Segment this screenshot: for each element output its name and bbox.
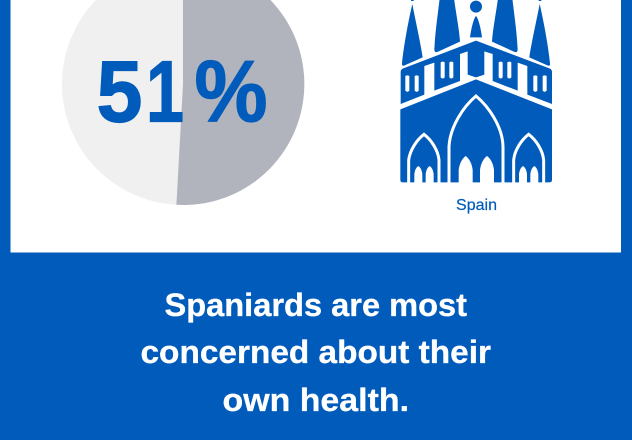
headline text: own health. (222, 382, 409, 418)
pie chart: 51 percent (62, 0, 304, 205)
icon: Sagrada Familia cathedral (400, 0, 552, 183)
label: Spain: Spain (456, 197, 497, 214)
main body (400, 79, 552, 182)
centre orb and spire (470, 1, 482, 13)
headline text: concerned about their (140, 334, 491, 370)
right outer spire (529, 4, 550, 66)
statistic: 51%: 5 (96, 44, 142, 140)
headline text (140, 287, 491, 418)
statistic: 51%: % (194, 44, 268, 140)
left inner spire (434, 0, 460, 52)
arches cut-outs (409, 96, 544, 183)
panel: white statistic panel (10, 0, 621, 252)
upper tier (401, 41, 552, 104)
headline text: Spaniards are most (164, 287, 467, 323)
statistic: 51% (96, 44, 268, 140)
left outer spire (402, 4, 423, 66)
statistic: 51%: 1 (146, 44, 184, 140)
right inner spire (492, 0, 518, 52)
